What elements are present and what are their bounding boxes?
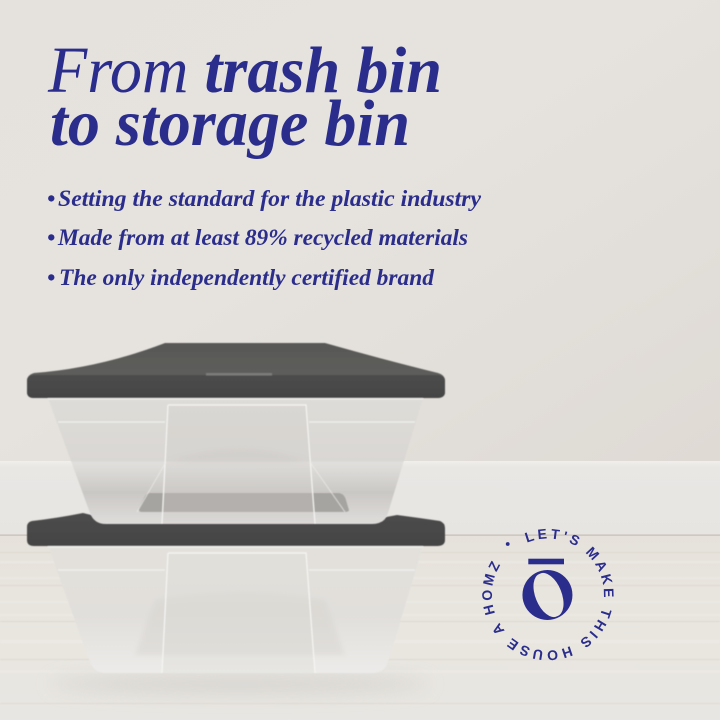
title: to storage bin: [50, 87, 410, 160]
background: baseboard: [0, 461, 720, 535]
logo: o with macron: [522, 559, 572, 620]
bullet 1: •: [47, 186, 55, 212]
bullet 2: •: [47, 225, 55, 251]
lower bin body: [48, 546, 423, 673]
bullet 3: •: [47, 265, 55, 291]
background: wooden floor: [0, 534, 720, 720]
bullet 3: The only independently certified brand: [59, 265, 435, 291]
upper bin lid: [27, 343, 445, 398]
logo badge: [482, 528, 614, 660]
circular slogan: LET'S MAKE THIS HOUSE A HOMZ: [482, 528, 614, 660]
title: [47, 34, 442, 160]
upper storage bin: [27, 343, 445, 524]
background: wall: [0, 0, 720, 462]
slogan dot: [506, 542, 510, 546]
title: From trash bin: [47, 34, 442, 107]
upper bin body: [48, 398, 423, 524]
bullet 2: Made from at least 89% recycled materials: [57, 225, 468, 251]
bullet 1: Setting the standard for the plastic industry: [58, 186, 482, 212]
interior floor shadow: [139, 493, 349, 512]
lower bin lid: [27, 513, 445, 546]
bullet list: [47, 186, 482, 291]
lower storage bin: [27, 513, 445, 673]
